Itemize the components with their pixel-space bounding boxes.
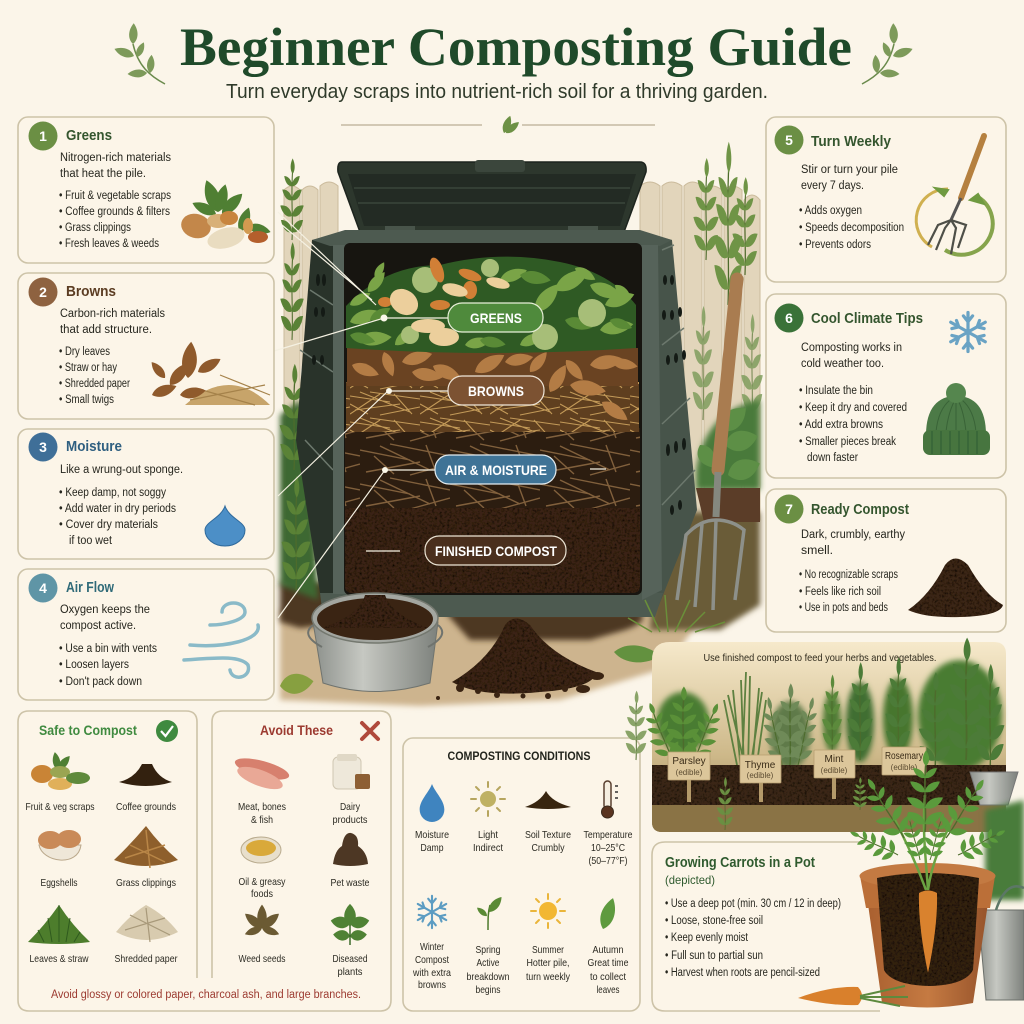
- condition label: spring: Spring: [476, 944, 501, 956]
- icon: compost pile: [908, 558, 1003, 617]
- condition label: winter: browns: [418, 979, 446, 991]
- pill: browns: BROWNS: [468, 383, 524, 399]
- small leaf: [279, 671, 315, 696]
- icon: thermometer: [602, 781, 618, 818]
- garden bed plank: [652, 805, 1006, 832]
- condition label: winter: [412, 941, 451, 991]
- item: eggshells: Eggshells: [40, 877, 78, 889]
- condition label: spring: Active: [476, 957, 500, 969]
- panel: 2 browns: • Straw or hay: [59, 362, 117, 374]
- item: grass clippings: [114, 826, 178, 889]
- rosemary group: [846, 638, 1006, 770]
- panel: growing carrots: • Harvest when roots are pencil-sized: [665, 967, 820, 979]
- panel: 6 cool climate tips: • Insulate the bin: [799, 385, 873, 397]
- terracotta pot with carrot: [844, 750, 1011, 1008]
- sign: thyme: [740, 755, 781, 802]
- sign: thyme: Thyme: [745, 760, 776, 771]
- pill: finished compost: FINISHED COMPOST: [435, 543, 557, 559]
- layer: twigs: [345, 428, 640, 508]
- carrot root: [919, 890, 937, 973]
- panel: 7 ready compost: [766, 489, 1006, 632]
- item: weed seeds: Weed seeds: [238, 953, 286, 965]
- heading: safe to compost: [39, 720, 178, 742]
- right mid plant: [691, 306, 764, 420]
- panel: 3 moisture: • Cover dry materials: [59, 519, 158, 531]
- panel: 1 greens: [18, 117, 274, 263]
- sign: rosemary: Rosemary: [885, 751, 923, 762]
- left plant mass: [280, 400, 318, 600]
- panel: 6 cool climate tips: • Add extra browns: [799, 419, 883, 431]
- leader lines: [274, 212, 606, 618]
- pot rim: [860, 876, 995, 908]
- panel: 1 greens: • Grass clippings: [59, 222, 131, 234]
- footnote: Avoid glossy or colored paper, charcoal ash, and large branches.: [51, 989, 361, 1001]
- icon: spring sprout: [475, 895, 505, 930]
- sign: parsley: (edible): [676, 768, 703, 777]
- icon: winter snowflake: [418, 896, 446, 928]
- item: diseased plants: plants: [338, 966, 362, 978]
- panel: growing carrots: [652, 842, 880, 1011]
- lid: [338, 160, 646, 236]
- panel: 1 greens: • Fresh leaves & weeds: [59, 238, 159, 250]
- left plants: [278, 158, 312, 590]
- condition label: winter: with extra: [412, 967, 451, 979]
- condition label: temperature: Temperature: [584, 829, 633, 841]
- icon: knit hat: [923, 383, 990, 455]
- condition label: soil texture: [525, 829, 571, 854]
- item: leaves and straw: Leaves & straw: [30, 953, 89, 965]
- panel: 2 browns: • Dry leaves: [59, 346, 110, 358]
- item: dairy products: [332, 754, 370, 826]
- bin frame: [333, 245, 662, 600]
- item: meat, bones and fish: [233, 754, 291, 826]
- plant pots: [696, 488, 760, 522]
- icon: divider leaf: [341, 115, 655, 136]
- panel: 2 browns: Browns: [66, 284, 116, 300]
- condition label: summer: Hotter pile,: [526, 957, 570, 969]
- item: fruit and veg scraps: Fruit & veg scraps: [26, 801, 94, 813]
- item: dairy products: products: [332, 814, 368, 826]
- sign: mint: Mint: [825, 754, 844, 765]
- panel: 2 browns: [18, 273, 274, 419]
- panel: 6 cool climate tips: Cool Climate Tips: [811, 311, 923, 327]
- panel: 1 greens: Greens: [66, 128, 112, 144]
- panel: 5 turn weekly: Stir or turn your pile: [801, 164, 898, 176]
- panel: 4 air flow: • Loosen layers: [59, 659, 129, 671]
- panel: 4 air flow: compost active.: [60, 620, 136, 632]
- right ground: [650, 512, 760, 630]
- panel: growing carrots: • Full sun to partial sun: [665, 950, 763, 962]
- condition label: autumn: leaves: [596, 984, 620, 996]
- panel: 1 greens: 1: [39, 128, 47, 144]
- item: meat, bones and fish: & fish: [251, 814, 273, 826]
- panel: 1 greens: • Coffee grounds & filters: [59, 206, 170, 218]
- soil cutaway: [877, 873, 979, 986]
- condition label: spring: [466, 944, 510, 996]
- icon: summer sun: [531, 894, 565, 928]
- ground soil patches: [280, 582, 643, 640]
- sign: thyme: (edible): [747, 771, 774, 780]
- item: pet waste: [330, 833, 370, 889]
- condition label: temperature: [584, 829, 633, 867]
- sign: mint: (edible): [821, 766, 848, 775]
- condition label: spring: begins: [476, 984, 500, 996]
- caption: Use finished compost to feed your herbs and vegetables.: [704, 652, 936, 664]
- panel: 6 cool climate tips: down faster: [807, 452, 858, 464]
- panel: 3 moisture: • Add water in dry periods: [59, 503, 176, 515]
- sign: parsley: [668, 752, 710, 802]
- panel: 5 turn weekly: • Prevents odors: [799, 239, 871, 251]
- condition label: autumn: Autumn: [592, 944, 624, 956]
- panel: 4 air flow: • Use a bin with vents: [59, 643, 157, 655]
- panel: 6 cool climate tips: 6: [785, 310, 793, 326]
- panel: composting conditions: [403, 738, 640, 1011]
- layer: greens: [346, 256, 636, 353]
- panel: 3 moisture: Moisture: [66, 439, 122, 455]
- garden bed soil: [652, 765, 1006, 805]
- condition label: autumn: to collect: [590, 971, 626, 983]
- condition label: moisture: [415, 829, 449, 854]
- item: diseased plants: Diseased: [332, 953, 368, 965]
- item: leaves and straw: [28, 905, 90, 965]
- icon: light: [471, 782, 505, 816]
- panel: 6 cool climate tips: • Keep it dry and covered: [799, 402, 907, 414]
- item: oil and greasy foods: foods: [251, 888, 273, 900]
- panel: 7 ready compost: smell.: [801, 545, 833, 557]
- heading: avoid these: [260, 722, 378, 739]
- panel: 5 turn weekly: • Adds oxygen: [799, 205, 862, 217]
- layer: straw: [346, 382, 639, 432]
- condition label: soil texture: Crumbly: [532, 842, 565, 854]
- icon: soil texture: [525, 791, 571, 809]
- garden scene behind the bin: [278, 142, 764, 706]
- item: meat, bones and fish: Meat, bones: [238, 801, 286, 813]
- item: shredded paper: Shredded paper: [114, 953, 178, 965]
- panel: 5 turn weekly: 5: [785, 132, 793, 148]
- panel: safe and avoid combined frame: [18, 711, 391, 1011]
- condition label: autumn: Great time: [588, 957, 629, 969]
- panel: 1 greens: Nitrogen-rich materials: [60, 152, 171, 164]
- panel: 2 browns: that add structure.: [60, 324, 152, 336]
- panel: 2 browns: 2: [39, 284, 47, 300]
- panel: 4 air flow: Air Flow: [66, 580, 115, 596]
- chives: [724, 672, 766, 770]
- plants left fringe: [624, 691, 648, 760]
- bin wall tier lines: [300, 245, 695, 505]
- condition label: light: Indirect: [473, 842, 503, 854]
- bin right wall: [640, 232, 697, 615]
- condition label: soil texture: Soil Texture: [525, 829, 571, 841]
- panel: 7 ready compost: Ready Compost: [811, 502, 909, 518]
- bin rim and base: [312, 230, 672, 617]
- panel: 7 ready compost: 7: [785, 501, 793, 517]
- ground tan: [280, 590, 700, 706]
- condition label: moisture: Damp: [420, 842, 444, 854]
- bin left wall: [296, 232, 345, 612]
- pill: greens: [448, 303, 543, 332]
- panel: 3 moisture: 3: [39, 439, 47, 455]
- condition label: spring: breakdown: [466, 971, 510, 983]
- condition label: light: [473, 829, 503, 854]
- item: grass clippings: Grass clippings: [116, 877, 176, 889]
- panel: 5 turn weekly: every 7 days.: [801, 180, 864, 192]
- right bush: [693, 400, 763, 490]
- panel: 6 cool climate tips: [766, 294, 1006, 478]
- icon: water drop: [205, 506, 245, 546]
- item: diseased plants: [330, 904, 370, 978]
- fence: [284, 182, 760, 560]
- watering can: [978, 886, 1024, 1000]
- sign: rosemary: [882, 747, 926, 775]
- sign: mint: [814, 750, 855, 799]
- panel: growing carrots: • Use a deep pot (min. 30 cm / 12 in deep): [665, 898, 841, 910]
- icon: snowflake: [951, 312, 985, 352]
- vent holes: [312, 274, 686, 515]
- condition label: summer: turn weekly: [526, 971, 571, 983]
- item: fruit and veg scraps: [26, 751, 94, 813]
- item: coffee grounds: [116, 764, 176, 813]
- panel: 6 cool climate tips: cold weather too.: [801, 358, 884, 370]
- pot body: [866, 890, 990, 1008]
- small metal pail: [970, 772, 1018, 805]
- herb garden scene: [624, 638, 1018, 832]
- panel: 2 browns: • Small twigs: [59, 394, 114, 406]
- panel: growing carrots: (depicted): [665, 873, 715, 887]
- icon: moisture: [420, 784, 444, 822]
- panel: 4 air flow: 4: [39, 580, 47, 596]
- mint: [821, 674, 843, 752]
- panel: 7 ready compost: • Use in pots and beds: [799, 602, 888, 614]
- condition label: light: Light: [478, 829, 498, 841]
- icon: left leaf sprig: [113, 23, 165, 84]
- panel: 1 greens: that heat the pile.: [60, 168, 146, 180]
- item: shredded paper: [114, 905, 178, 965]
- grass tuft: [628, 595, 725, 632]
- panel: 5 turn weekly: • Speeds decomposition: [799, 222, 904, 234]
- right tall plant: [692, 142, 759, 305]
- sign: rosemary: (edible): [891, 763, 918, 772]
- panel: growing carrots: • Loose, stone-free soil: [665, 915, 763, 927]
- garden fork: [677, 279, 744, 610]
- panel: 3 moisture: Like a wrung-out sponge.: [60, 464, 183, 476]
- item: weed seeds: [238, 905, 286, 965]
- parsley: [635, 687, 731, 766]
- panel: 5 turn weekly: Turn Weekly: [811, 134, 891, 150]
- icon: vegetable scraps: [178, 178, 272, 253]
- panel: 3 moisture: [18, 429, 274, 559]
- item: coffee grounds: Coffee grounds: [116, 801, 176, 813]
- condition label: temperature: (50–77°F): [588, 855, 628, 867]
- pill: browns: [448, 376, 544, 405]
- condition label: autumn: [588, 944, 629, 996]
- layer: brown leaves: [347, 348, 639, 425]
- condition label: winter: Compost: [415, 954, 449, 966]
- heading: safe to compost: Safe to Compost: [39, 722, 137, 738]
- panel: 3 moisture: • Keep damp, not soggy: [59, 487, 166, 499]
- foliage masses: [657, 660, 1002, 770]
- lying carrot: [798, 986, 908, 1006]
- subtitle: Turn everyday scraps into nutrient-rich soil for a thriving garden.: [226, 81, 768, 103]
- icon: air swirl: [184, 603, 258, 677]
- item: pet waste: Pet waste: [330, 877, 370, 889]
- condition label: summer: Summer: [532, 944, 564, 956]
- sign: parsley: Parsley: [672, 756, 706, 767]
- condition label: summer: [526, 944, 571, 983]
- side plants: [985, 800, 1024, 900]
- item: dairy products: Dairy: [340, 801, 361, 813]
- condition label: moisture: Moisture: [415, 829, 449, 841]
- panel: growing carrots: • Keep evenly moist: [665, 932, 749, 944]
- heading: avoid these: Avoid These: [260, 722, 333, 738]
- small sprouts: [716, 777, 868, 830]
- icon: dry leaves and straw: [148, 341, 270, 405]
- panel: 2 browns: • Shredded paper: [59, 378, 130, 390]
- panel: 4 air flow: Oxygen keeps the: [60, 604, 150, 616]
- panel: 7 ready compost: Dark, crumbly, earthy: [801, 529, 905, 541]
- pill: air and moisture: [435, 455, 556, 484]
- metal bucket of compost: [308, 593, 442, 692]
- panel: 6 cool climate tips: • Smaller pieces break: [799, 436, 896, 448]
- item: eggshells: [38, 830, 81, 889]
- panel: 6 cool climate tips: Composting works in: [801, 342, 902, 354]
- panel: 4 air flow: [18, 569, 274, 700]
- pill: air and moisture: AIR & MOISTURE: [445, 462, 547, 478]
- carrot foliage: [844, 750, 1011, 890]
- icon: fork with arrows: [916, 136, 993, 255]
- compost bin: [296, 160, 697, 617]
- icon: right leaf sprig: [862, 23, 914, 84]
- panel: 7 ready compost: • Feels like rich soil: [799, 586, 881, 598]
- condition label: winter: Winter: [420, 941, 444, 953]
- panel: 7 ready compost: • No recognizable scraps: [799, 569, 898, 581]
- pill: finished compost: [425, 536, 566, 565]
- leader dots: [380, 314, 392, 473]
- layer: finished compost: [345, 506, 640, 593]
- panel: composting conditions: COMPOSTING CONDITIONS: [448, 749, 590, 763]
- panel: 5 turn weekly: [766, 117, 1006, 282]
- panel: growing carrots: Growing Carrots in a Pot: [665, 855, 815, 871]
- thyme: [755, 683, 825, 768]
- soil pile: [436, 618, 604, 700]
- item: oil and greasy foods: [238, 837, 286, 900]
- panel: 2 browns: Carbon-rich materials: [60, 308, 165, 320]
- panel: 3 moisture: if too wet: [69, 535, 113, 547]
- condition label: temperature: 10–25°C: [591, 842, 625, 854]
- icon: autumn leaf: [597, 896, 619, 931]
- panel: 4 air flow: • Don't pack down: [59, 676, 142, 688]
- bin interior: [344, 243, 642, 595]
- panel: 1 greens: • Fruit & vegetable scraps: [59, 190, 171, 202]
- pill: greens: GREENS: [470, 310, 522, 326]
- title: Beginner Composting Guide: [180, 17, 852, 77]
- fallen leaf: [613, 644, 661, 664]
- item: oil and greasy foods: Oil & greasy: [238, 876, 286, 888]
